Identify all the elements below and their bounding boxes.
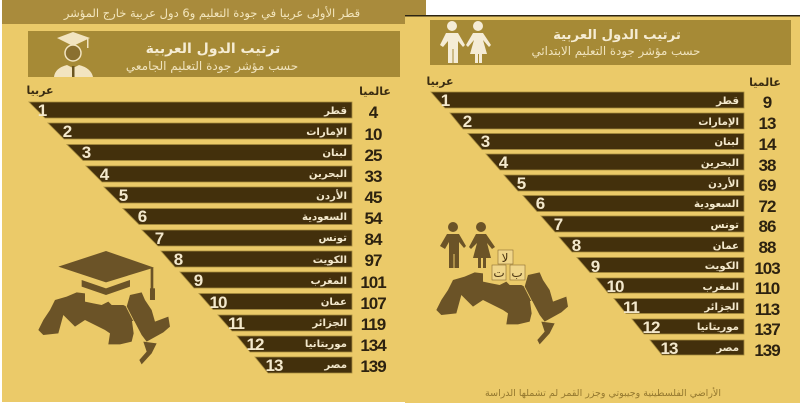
ranking rows: university: 33	[365, 167, 382, 186]
ranking rows: university: 1	[38, 101, 47, 120]
icon: letter blocks: ت	[493, 266, 505, 280]
ranking rows: primary: تونس	[711, 220, 739, 231]
ranking rows: university: 10	[365, 125, 382, 144]
ranking rows: university: 54	[365, 209, 383, 228]
ranking rows: university: 25	[365, 146, 382, 165]
icon: children silhouette	[440, 222, 495, 268]
ranking rows: primary	[431, 91, 780, 360]
ranking rows: primary: 2	[463, 112, 472, 131]
ranking rows: university: الكويت	[313, 255, 347, 266]
panel: university ranking	[2, 0, 426, 402]
ranking rows: primary: المغرب	[703, 282, 739, 293]
footnote: الأراضي الفلسطينية وجيبوتي وجزر القمر لم تشملها الدراسة	[485, 387, 721, 399]
ranking rows: university: السعودية	[302, 212, 347, 223]
icon: graduation cap	[58, 251, 155, 300]
ranking rows: university: لبنان	[322, 148, 347, 159]
ranking rows: university: 107	[360, 294, 386, 313]
ranking rows: primary: 137	[754, 320, 780, 339]
ranking rows: university: مصر	[323, 360, 347, 371]
ranking rows: university	[29, 101, 387, 376]
icon: letter blocks: لا	[502, 251, 508, 265]
ranking rows: primary: البحرين	[701, 158, 739, 169]
ranking rows: primary: 11	[623, 298, 640, 317]
ranking rows: university: الأردن	[316, 189, 347, 202]
ranking rows: primary: 14	[759, 135, 777, 154]
ranking rows: university: 101	[360, 273, 386, 292]
ranking rows: primary: 139	[754, 341, 780, 360]
map: Arab world	[436, 272, 568, 344]
ranking rows: university: 119	[361, 315, 386, 334]
ranking rows: university: الإمارات	[306, 127, 347, 138]
ranking rows: university: 11	[228, 314, 245, 333]
ranking rows: primary: 9	[763, 93, 772, 112]
ranking rows: primary: قطر	[715, 96, 739, 107]
ranking rows: university: 4	[369, 103, 379, 122]
ranking rows: university: 4	[100, 165, 110, 184]
ranking rows: university: 6	[138, 207, 147, 226]
ranking rows: primary: 1	[441, 91, 450, 110]
map: Arab world	[38, 292, 170, 364]
icon: children	[440, 21, 491, 63]
ranking rows: primary: 88	[759, 238, 776, 257]
column heading: arab: عربيا	[426, 75, 454, 88]
ranking rows: primary: 4	[499, 153, 509, 172]
white corner	[426, 0, 800, 15]
top banner	[2, 0, 426, 24]
icon: letter blocks	[492, 250, 525, 280]
ranking rows: primary: 103	[754, 259, 780, 278]
column heading: arab: عربيا	[26, 84, 54, 97]
ranking rows: primary: 113	[755, 300, 780, 319]
ranking rows: primary: الأردن	[708, 177, 739, 190]
ranking rows: university: البحرين	[309, 169, 347, 180]
ranking rows: primary: 69	[759, 176, 776, 195]
ranking rows: primary: 3	[481, 132, 490, 151]
ranking rows: university: عمان	[321, 297, 347, 308]
ranking rows: primary: السعودية	[694, 199, 739, 210]
ranking rows: university: 139	[360, 357, 386, 376]
title: ترتيب الدول العربية	[553, 28, 681, 43]
ranking rows: university: 8	[174, 250, 183, 269]
ranking rows: university: 45	[365, 188, 382, 207]
subtitle: حسب مؤشر جودة التعليم الابتدائي	[532, 44, 700, 59]
ranking rows: primary: موريتانيا	[697, 322, 739, 333]
ranking rows: primary: 6	[536, 194, 545, 213]
ranking rows: university: 12	[247, 335, 264, 354]
ranking rows: university: 7	[155, 229, 164, 248]
ranking rows: primary: 9	[591, 257, 600, 276]
ranking rows: university: 2	[63, 122, 72, 141]
ranking rows: university: الجزائر	[311, 318, 347, 329]
ranking rows: university: 9	[194, 271, 203, 290]
ranking rows: primary: الكويت	[705, 261, 739, 272]
ranking rows: university: 3	[82, 143, 91, 162]
ranking rows: primary: 72	[759, 197, 776, 216]
ranking rows: primary: 10	[607, 277, 624, 296]
header box: university	[28, 31, 400, 77]
ranking rows: university: موريتانيا	[305, 339, 347, 350]
ranking rows: university: 134	[360, 336, 387, 355]
ranking rows: university: 5	[119, 186, 128, 205]
ranking rows: primary: الإمارات	[698, 117, 739, 128]
ranking rows: primary: 8	[572, 236, 581, 255]
subtitle: حسب مؤشر جودة التعليم الجامعي	[126, 59, 298, 74]
title: ترتيب الدول العربية	[146, 41, 280, 57]
icon: graduate	[54, 32, 93, 77]
column heading: world: عالميا	[749, 76, 781, 89]
column heading: world: عالميا	[359, 85, 391, 98]
ranking rows: university: 13	[266, 356, 283, 375]
ranking rows: primary: لبنان	[714, 137, 739, 148]
ranking rows: university: المغرب	[311, 276, 347, 287]
ranking rows: primary: الجزائر	[703, 302, 739, 313]
ranking rows: university: تونس	[319, 233, 347, 244]
ranking rows: primary: 13	[759, 114, 776, 133]
ranking rows: university: 84	[365, 230, 383, 249]
ranking rows: primary: 38	[759, 156, 776, 175]
ranking rows: primary: 86	[759, 217, 776, 236]
ranking rows: university: 97	[365, 251, 382, 270]
ranking rows: primary: 13	[661, 339, 678, 358]
icon: letter blocks: ب	[511, 266, 523, 280]
ranking rows: university: 10	[210, 293, 227, 312]
ranking rows: primary: 7	[554, 215, 563, 234]
top banner: قطر الأولى عربيا في جودة التعليم و6 دول عربية خارج المؤشر	[63, 6, 360, 21]
ranking rows: primary: عمان	[713, 241, 739, 252]
ranking rows: university: قطر	[323, 106, 347, 117]
panel: primary ranking	[405, 15, 800, 403]
ranking rows: primary: 5	[517, 174, 526, 193]
ranking rows: primary: 12	[643, 318, 660, 337]
header box: primary	[430, 20, 791, 65]
ranking rows: primary: مصر	[715, 343, 739, 354]
ranking rows: primary: 110	[755, 279, 780, 298]
